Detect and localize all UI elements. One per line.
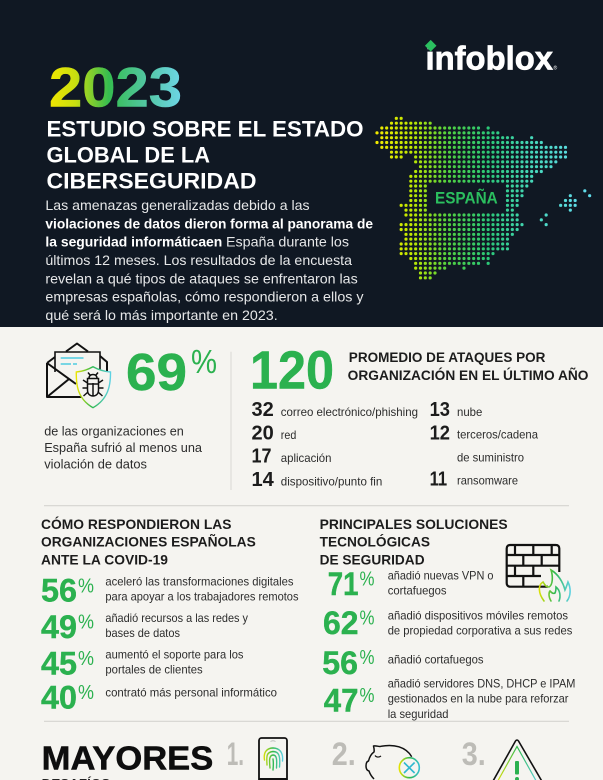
stat: 49% network resources: añadió recursos a las redes y (105, 611, 248, 625)
stat: 49% network resources: 49 (41, 609, 77, 645)
stat: 56% digital transformation: para apoyar a los trabajadores remotos (105, 590, 299, 604)
challenge 1: number and phone icon: 1. (227, 736, 244, 772)
stat: 47% cloud DNS: la seguridad (388, 707, 448, 721)
stat: 40% IT staff: 40 (41, 679, 77, 715)
heading: COVID response: ORGANIZACIONES ESPAÑOLAS (41, 533, 256, 550)
intro text: revelan a qué tipos de ataques se enfrentaron las (45, 270, 358, 286)
title (46, 117, 364, 193)
list: attack types left: red (281, 428, 296, 442)
stat: 62% mobile devices: % (360, 607, 375, 629)
heading: average attacks: PROMEDIO DE ATAQUES POR (349, 350, 546, 365)
stat: 71% VPN (328, 566, 494, 602)
stat: 69%: 69 (126, 344, 187, 402)
heading: security solutions: TECNOLÓGICAS (320, 533, 430, 550)
title: CIBERSEGURIDAD (46, 168, 256, 193)
stat: 45% customer portals: % (78, 648, 94, 670)
stat: 62% mobile devices (323, 605, 572, 641)
intro text: la seguridad informáticaen (45, 234, 222, 250)
intro text: qué será lo más importante en 2023. (45, 307, 278, 323)
list: attack types right: de suministro (457, 451, 524, 465)
list: attack types left: aplicación (281, 451, 332, 465)
text: data breach description: de las organizaciones en (44, 423, 184, 438)
stat: 56% digital transformation: % (78, 576, 94, 598)
heading: COVID response (41, 515, 256, 567)
intro text: empresas españolas, cómo respondieron a ellos y (45, 289, 364, 305)
list: attack types left: 20 (252, 422, 274, 444)
intro text (45, 197, 373, 323)
heading: 2023: 2023 (49, 56, 182, 119)
list: attack types right: 11 (430, 468, 447, 490)
text: data breach description: España sufrió al menos una (44, 440, 203, 455)
stat: 40% IT staff (41, 679, 277, 715)
heading: security solutions: DE SEGURIDAD (320, 551, 425, 567)
heading: average attacks: ORGANIZACIÓN EN EL ÚLTIMO AÑO (348, 368, 588, 383)
intro text: violaciones de datos dieron forma al panorama de (45, 215, 373, 231)
stat: 71% VPN: % (360, 569, 375, 591)
heading: biggest challenges: MAYORES (42, 739, 213, 776)
text: data breach description: violación de datos (44, 457, 147, 472)
stat: 71% VPN: añadió nuevas VPN o (388, 568, 494, 582)
stat: 56% digital transformation: 56 (41, 573, 77, 609)
stat: 56% digital transformation: aceleró las transformaciones digitales (105, 575, 294, 589)
title: GLOBAL DE LA (46, 143, 210, 168)
stat: 45% customer portals: portales de clientes (105, 663, 203, 677)
icon: firewall (507, 545, 570, 601)
heading: security solutions (320, 516, 508, 567)
stat: 69% (126, 343, 217, 402)
stat: 47% cloud DNS: 47 (324, 683, 358, 719)
list: attack types left: 32 (252, 399, 274, 421)
intro text: Las amenazas generalizadas debido a las (45, 197, 310, 213)
stat: 62% mobile devices: de propiedad corporativa a sus redes (388, 624, 572, 638)
icon: envelope with bug shield (47, 344, 111, 408)
title: ESTUDIO SOBRE EL ESTADO (46, 117, 364, 142)
heading: COVID response: ANTE LA COVID-19 (41, 551, 168, 567)
list: attack types left (252, 399, 418, 491)
logo: infoblox: infoblox (426, 39, 554, 76)
dotted map of Spain (377, 118, 590, 278)
stat: 56% firewalls: 56 (322, 645, 358, 681)
stat: 49% network resources (41, 609, 248, 645)
stat: 56% firewalls: % (360, 647, 375, 669)
list: attack types left: 17 (252, 446, 272, 468)
list: attack types left: correo electrónico/phishing (281, 405, 418, 419)
stat: 40% IT staff: contrató más personal informático (105, 686, 277, 700)
stat: 56% firewalls: añadió cortafuegos (388, 652, 484, 666)
challenge 2: number and piggy bank icon (332, 736, 419, 779)
heading: security solutions: PRINCIPALES SOLUCIONES (320, 516, 508, 532)
list: attack types left: dispositivo/punto fin (281, 474, 382, 488)
stat: 47% cloud DNS: añadió servidores DNS, DHCP e IPAM (388, 676, 575, 690)
stat: 49% network resources: % (78, 612, 94, 634)
text: data breach description (44, 423, 203, 472)
list: attack types right (430, 399, 538, 490)
stat: 45% customer portals: 45 (41, 645, 77, 681)
list: attack types right: 13 (430, 399, 450, 421)
map label: ESPAÑA: ESPAÑA (435, 187, 498, 207)
stat: 62% mobile devices: añadió dispositivos móviles remotos (388, 608, 568, 622)
challenge 1: number and phone icon (227, 736, 287, 780)
challenge 3: number and warning triangle icon: 3. (462, 736, 486, 772)
stat: 47% cloud DNS: gestionados en la nube para reforzar (388, 692, 568, 706)
stat: 71% VPN: 71 (328, 566, 358, 602)
list: attack types right: terceros/cadena (457, 428, 538, 442)
stat: 49% network resources: bases de datos (105, 626, 180, 640)
list: attack types left: 14 (252, 469, 275, 491)
stat: 45% customer portals (41, 645, 244, 681)
stat: 69%: % (191, 343, 217, 380)
stat: 56% digital transformation (41, 573, 298, 609)
panel: dark header background (0, 0, 603, 327)
stat: 47% cloud DNS: % (360, 685, 375, 707)
list: attack types right: nube (457, 405, 483, 419)
heading: COVID response: CÓMO RESPONDIERON LAS (41, 515, 232, 532)
challenge 3: number and warning triangle icon (462, 736, 547, 780)
stat: 56% firewalls (322, 645, 484, 681)
list: attack types right: ransomware (457, 474, 518, 488)
stat: 45% customer portals: aumentó el soporte para los (105, 647, 244, 661)
stat: 40% IT staff: % (78, 682, 94, 704)
list: attack types right: 12 (430, 422, 450, 444)
stat: 120: 120 (250, 340, 334, 400)
stat: 62% mobile devices: 62 (323, 605, 358, 641)
intro text: últimos 12 meses. Los resultados de la encuesta (45, 252, 352, 268)
intro text: España durante los (226, 234, 349, 250)
stat: 47% cloud DNS (324, 676, 575, 721)
logo: infoblox: ® (554, 64, 558, 72)
heading: average attacks (348, 350, 588, 383)
stat: 71% VPN: cortafuegos (388, 584, 446, 598)
challenge 2: number and piggy bank icon: 2. (332, 736, 356, 772)
